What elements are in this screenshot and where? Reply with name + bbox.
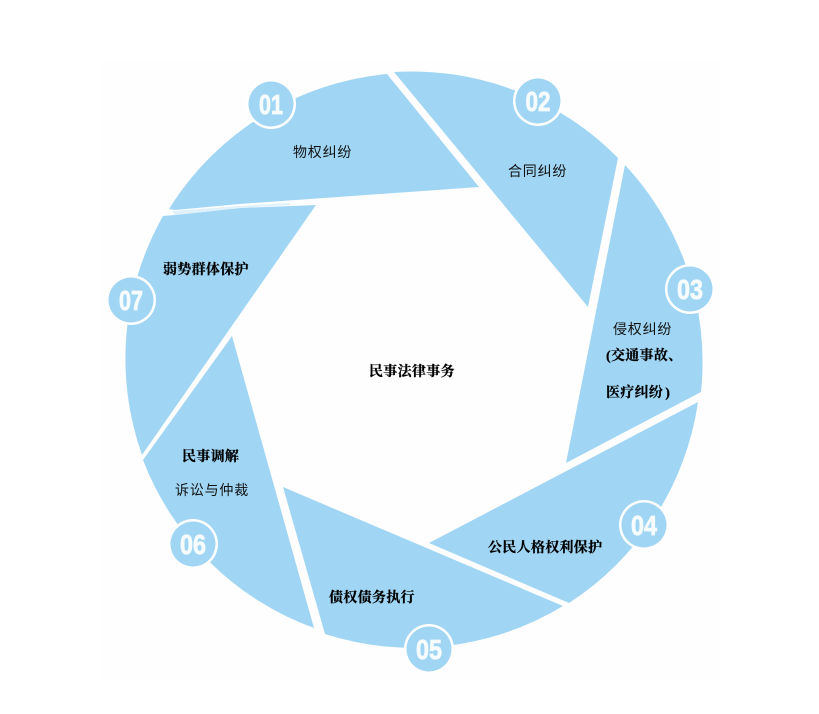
badge 03 (665, 264, 715, 314)
label 03 (606, 321, 682, 401)
center title: 民事法律事务 (369, 363, 455, 380)
pale streak between segments 01 and 07 (172, 203, 290, 215)
label 05: 债权债务执行 (329, 589, 415, 606)
badge 05: 05 (416, 634, 442, 665)
panel: segment 06 (143, 336, 314, 628)
label 07: 弱势群体保护 (163, 261, 249, 278)
label 02: 合同纠纷 (508, 164, 567, 180)
badge 04 (619, 500, 669, 550)
badge 07: 07 (119, 285, 143, 316)
label 06: 诉讼与仲裁 (175, 483, 249, 499)
label 04: 公民人格权利保护 (488, 539, 602, 556)
label 03: 医疗纠纷) (606, 384, 670, 401)
badge 03: 03 (677, 274, 703, 305)
badge 02: 02 (526, 86, 550, 117)
panel: segment 01 (169, 74, 479, 210)
label 06 (175, 448, 249, 499)
panel: segment 02 (394, 71, 618, 307)
label 06: 民事调解 (182, 448, 239, 465)
badge 02 (513, 76, 563, 126)
badge 06 (168, 519, 218, 569)
badge 07 (106, 275, 156, 325)
badge 01: 01 (259, 89, 283, 120)
panel: segment 03 (566, 165, 703, 463)
badge 05 (404, 624, 454, 674)
panel: segment 05 (283, 487, 563, 648)
badge 04: 04 (631, 510, 657, 541)
panel: segment 04 (429, 402, 698, 603)
label 01: 物权纠纷 (293, 145, 352, 161)
panel: segment 07 (125, 205, 316, 455)
label 03: 侵权纠纷 (613, 321, 672, 338)
badge 01 (246, 79, 296, 129)
badge 06: 06 (180, 529, 206, 560)
label 03: (交通事故、 (606, 347, 682, 364)
